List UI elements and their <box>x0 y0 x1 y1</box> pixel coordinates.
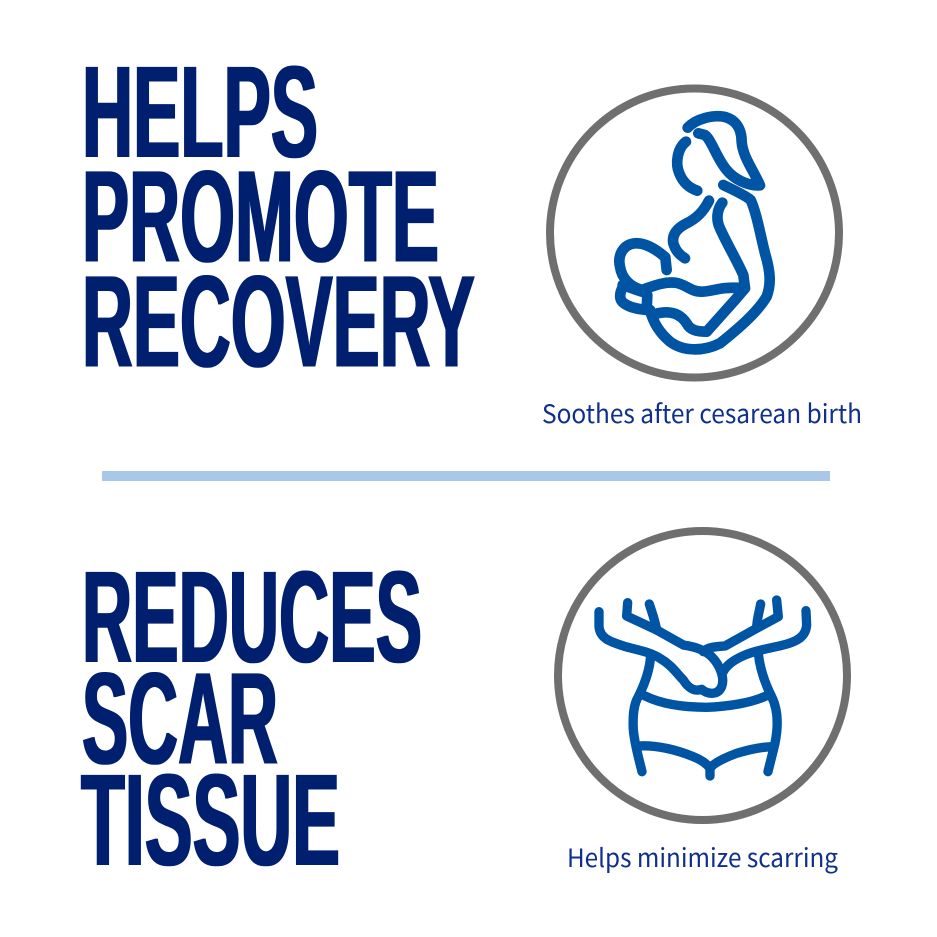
heading: reduces scar tissue: SCAR <box>82 644 278 792</box>
heading: helps promote recovery <box>82 38 475 394</box>
heading: reduces scar tissue: REDUCES <box>82 543 422 690</box>
heading: reduces scar tissue: TISSUE <box>81 746 340 893</box>
heading: helps promote recovery: HELPS <box>82 38 318 185</box>
divider bar <box>102 471 830 481</box>
heading: helps promote recovery: RECOVERY <box>82 248 475 394</box>
icon: abdomen with crossed arms in circle <box>558 531 847 820</box>
caption: soothes after cesarean birth: Soothes after cesarean birth <box>542 394 862 431</box>
heading: reduces scar tissue <box>81 543 422 893</box>
heading: helps promote recovery: PROMOTE <box>82 142 439 290</box>
icon: breastfeeding mother in circle <box>550 88 839 378</box>
caption: helps minimize scarring: Helps minimize scarring <box>567 838 839 875</box>
